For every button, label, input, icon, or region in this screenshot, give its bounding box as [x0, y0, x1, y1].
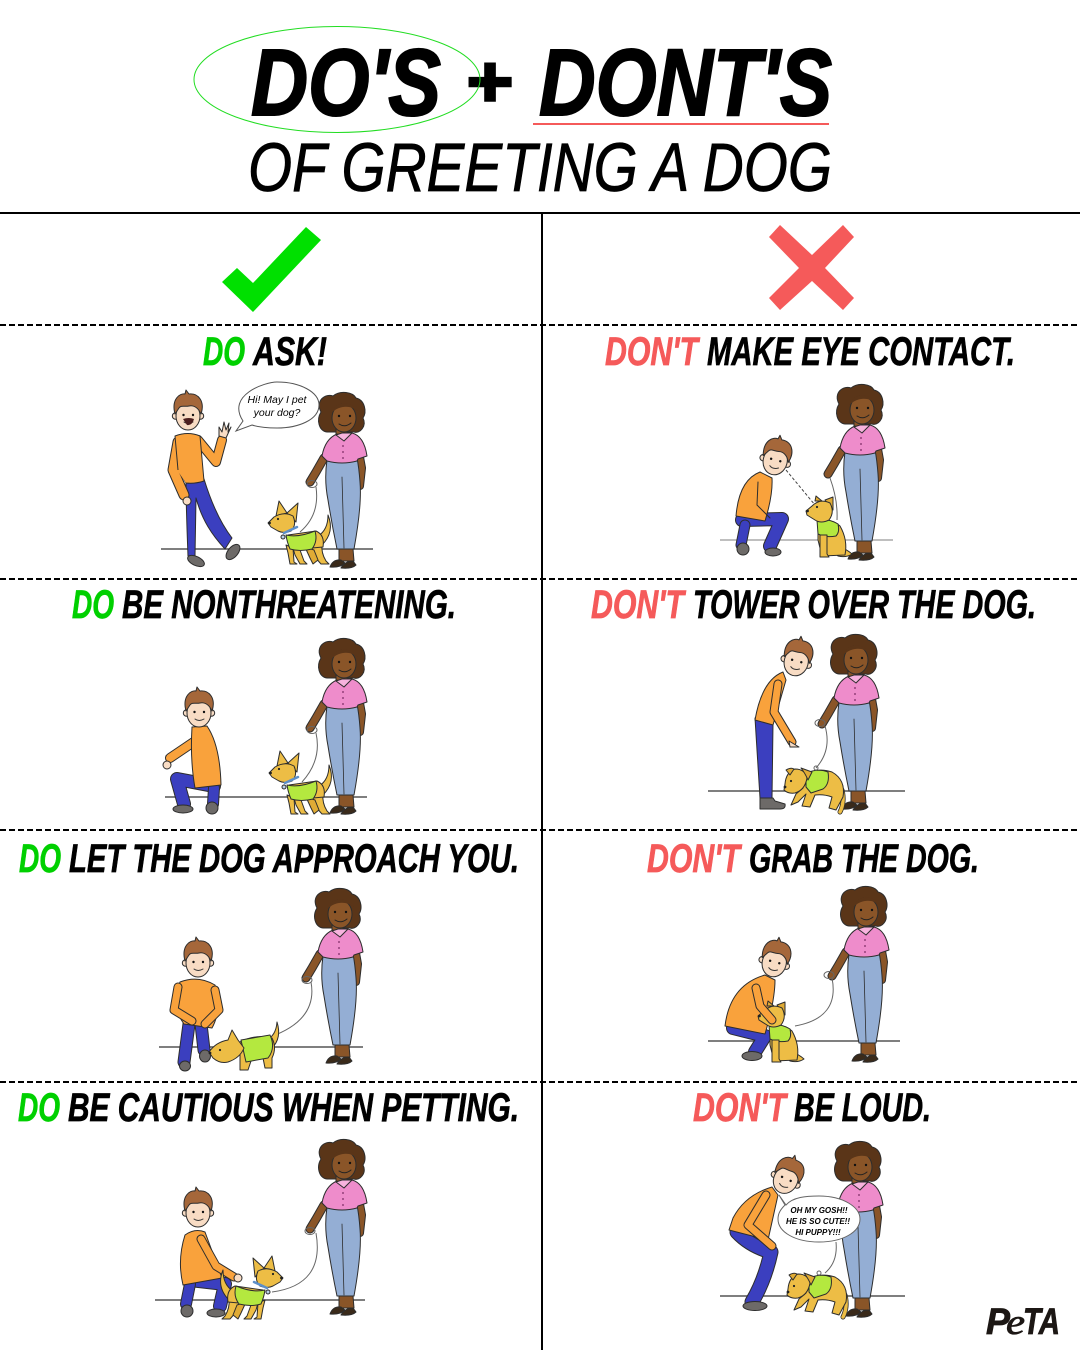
illustration: boy staring at dog — [720, 384, 893, 560]
heading: do be cautious when petting: DO — [18, 1086, 60, 1130]
heading: do ask — [203, 330, 327, 374]
heading: don't make eye contact: DON'T — [605, 330, 701, 374]
heading: don't grab the dog — [647, 837, 979, 881]
illustration: boy grabbing dog — [708, 886, 900, 1062]
illustration: crouching boy with side stance — [163, 638, 367, 814]
panel: don't be loud — [693, 1086, 931, 1317]
speech bubble: may I pet your dog: your dog? — [253, 407, 301, 419]
heading: don't make eye contact — [605, 330, 1015, 374]
plus sign: + — [465, 42, 512, 122]
logo: PETA: e — [1006, 1302, 1025, 1342]
logo: PETA: TA — [1023, 1301, 1060, 1342]
title: do's and dont's — [194, 26, 832, 206]
panel: don't make eye contact — [605, 330, 1015, 560]
heading: do let the dog approach you: DO — [19, 837, 61, 881]
logo: PETA: P — [986, 1301, 1010, 1342]
speech bubble: oh my gosh: HI PUPPY!!! — [795, 1228, 841, 1237]
dog sniffing toward boy — [209, 1022, 279, 1070]
red underline under DONT'S — [533, 123, 829, 125]
icon: green check mark — [222, 227, 321, 312]
heading: don't tower over the dog: DON'T — [591, 583, 687, 627]
heading: do ask: DO — [203, 330, 245, 374]
heading: do be nonthreatening — [72, 583, 456, 627]
illustration: dog approaches crouching boy — [159, 888, 363, 1071]
illustration: boy towering over dog — [708, 633, 905, 812]
speech bubble: oh my gosh: OH MY GOSH!! — [790, 1206, 848, 1215]
illustration: boy gently petting dog — [155, 1139, 367, 1319]
speech bubble: may I pet your dog: Hi! May I pet — [248, 394, 308, 406]
heading: don't be loud: DON'T — [693, 1086, 789, 1130]
speech bubble: may I pet your dog — [236, 382, 319, 431]
heading: do be cautious when petting: BE CAUTIOUS WHEN PETTING. — [68, 1086, 519, 1130]
icon: red cross — [769, 225, 854, 310]
panel: don't grab the dog — [647, 837, 979, 1062]
panel: don't tower over the dog — [591, 583, 1036, 812]
heading: do be cautious when petting — [18, 1086, 519, 1130]
heading: don't grab the dog: GRAB THE DOG. — [749, 837, 979, 881]
panel: do let the dog approach you — [19, 837, 519, 1071]
heading: do let the dog approach you — [19, 837, 519, 881]
heading: DO'S: DO'S — [251, 30, 441, 136]
heading: do be nonthreatening: BE NONTHREATENING. — [122, 583, 456, 627]
panel: do be cautious when petting — [18, 1086, 519, 1319]
subtitle: OF GREETING A DOG — [248, 129, 832, 206]
heading: do let the dog approach you: LET THE DOG APPROACH YOU. — [69, 837, 519, 881]
green ellipse around DO'S — [194, 26, 480, 132]
speech bubble: oh my gosh: HE IS SO CUTE!! — [786, 1217, 850, 1226]
panel: do be nonthreatening — [72, 583, 456, 814]
heading: do ask: ASK! — [252, 330, 327, 374]
heading: don't be loud: BE LOUD. — [794, 1086, 931, 1130]
heading: don't grab the dog: DON'T — [647, 837, 743, 881]
panel: do ask — [161, 330, 373, 569]
heading: DONT'S: DONT'S — [539, 30, 832, 136]
heading: don't be loud — [693, 1086, 931, 1130]
illustration: boy shouting at dog — [720, 1141, 905, 1317]
illustration: boy asks woman with dog — [161, 390, 373, 569]
logo: PETA — [986, 1301, 1060, 1342]
heading: do be nonthreatening: DO — [72, 583, 114, 627]
speech bubble: oh my gosh — [778, 1195, 860, 1242]
